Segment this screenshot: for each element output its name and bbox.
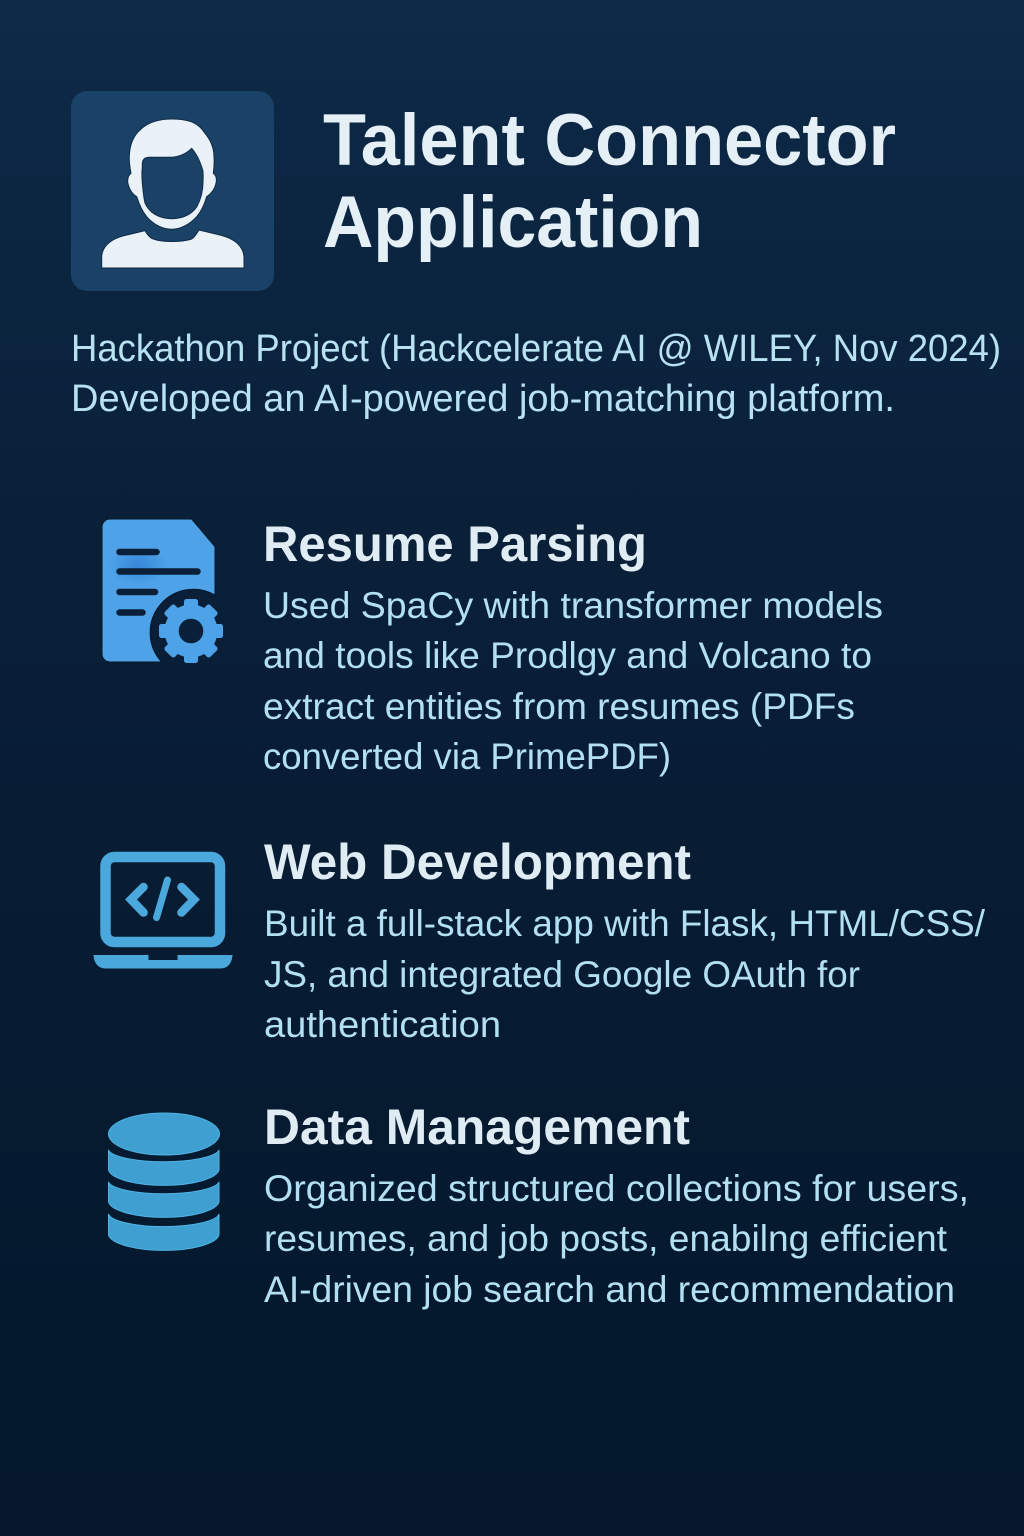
icon: person avatar tile [71, 91, 274, 291]
text: resume parsing description [263, 585, 883, 777]
heading: data management: Data Management [264, 1099, 690, 1155]
heading: web development: Web Development [264, 834, 691, 890]
subtitle text block [71, 328, 1001, 420]
icon: resume document with gear [102, 519, 223, 663]
section: data management [264, 1099, 969, 1310]
text: resume parsing description: Used SpaCy with transformer models [263, 585, 883, 626]
icon: laptop with code [94, 857, 232, 968]
text: web development description: JS, and integrated Google OAuth for [264, 954, 860, 995]
section: web development [264, 834, 986, 1045]
subtitle text block: Hackathon Project (Hackcelerate AI @ WILEY, Nov 2024) [71, 328, 1001, 370]
text: data management description [264, 1168, 969, 1310]
text: web development description: Built a full-stack app with Flask, HTML/CSS/ [264, 903, 986, 944]
text: web development description: authentication [264, 1004, 501, 1045]
title: Application [323, 182, 703, 263]
subtitle text block: Developed an AI-powered job-matching platform. [71, 378, 895, 420]
text: resume parsing description: extract entities from resumes (PDFs [263, 686, 855, 727]
text: web development description [264, 903, 986, 1045]
text: data management description: AI-driven job search and recommendation [264, 1269, 955, 1310]
icon: database cylinder [108, 1113, 220, 1250]
text: data management description: Organized structured collections for users, [264, 1168, 969, 1209]
title [323, 100, 896, 263]
title: Talent Connector [323, 100, 896, 181]
text: resume parsing description: and tools like Prodlgy and Volcano to [263, 635, 872, 676]
heading: resume parsing: Resume Parsing [263, 516, 647, 572]
text: resume parsing description: converted via PrimePDF) [263, 736, 671, 777]
section: resume parsing [263, 516, 883, 777]
text: data management description: resumes, and job posts, enabilng efficient [264, 1218, 948, 1259]
